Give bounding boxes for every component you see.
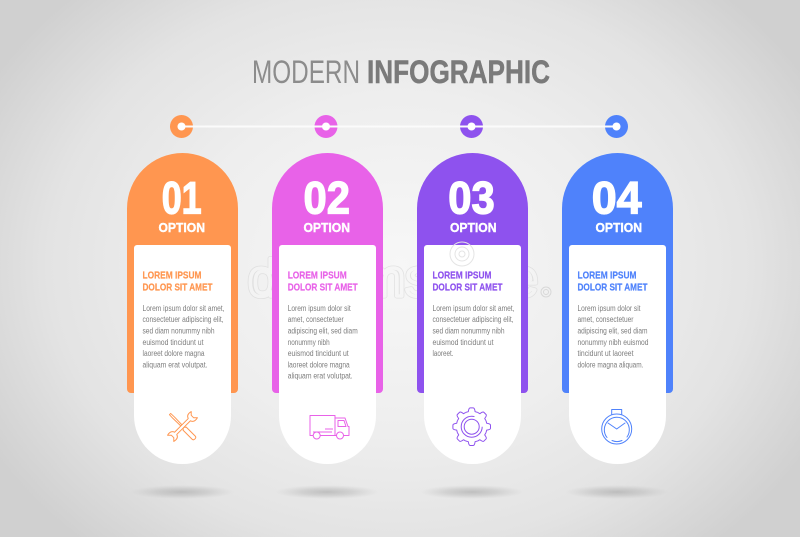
panel: option 01 [127,153,238,499]
number 02: 02 [304,172,350,224]
option label 03: OPTION [450,220,496,235]
heading 03 [432,270,502,293]
body text 01: Lorem ipsum dolor sit amet, [142,304,224,313]
body text 02: adipiscing elit, sed diam [288,326,358,336]
body text 03: sed diam nonummy nibh [432,326,504,336]
number 01: 01 [162,172,202,224]
title: INFOGRAPHIC [367,54,550,90]
body text 01: laoreet dolore magna [142,349,205,358]
icon: stopwatch [602,410,632,444]
ground shadow 03 [420,485,524,499]
icon: delivery truck [310,416,349,439]
colored card 01 [127,153,238,393]
number 03: 03 [448,172,495,224]
heading 02: DOLOR SIT AMET [288,282,358,293]
body text 03: euismod tincidunt ut [432,338,494,347]
colored card 03 [417,153,528,393]
body text 02: aliquam erat volutpat. [288,372,353,381]
body text 01: sed diam nonummy nibh [142,326,214,336]
heading 01: LOREM IPSUM [142,270,202,281]
ground shadow 01 [130,485,234,499]
white card 03 [424,245,521,464]
panel: option 02 [272,153,383,499]
title [252,54,550,90]
body text 02: Lorem ipsum dolor sit [288,304,351,313]
option label 01: OPTION [158,220,205,235]
body text 04 [578,304,648,369]
heading 04: DOLOR SIT AMET [578,282,648,293]
body text 02: euismod tincidunt ut [288,349,349,358]
heading 03: DOLOR SIT AMET [432,282,502,293]
watermark swirl [450,242,474,266]
timeline connector with markers [170,115,628,138]
body text 04: nonummy nibh euismod [578,338,648,347]
title: MODERN [252,54,360,90]
panel: option 04 [562,153,673,499]
white card 01 [134,245,231,464]
body text 03 [432,304,514,358]
body text 01: euismod tincidunt ut [142,338,204,347]
white card 02 [279,245,376,464]
watermark: dreamstime [248,250,538,308]
number 04: 04 [592,172,642,224]
heading 01: DOLOR SIT AMET [142,282,212,293]
body text 02: nonummy nibh [288,338,330,347]
body text 01: consectetuer adipiscing elit, [142,315,224,324]
ground shadow 04 [565,485,669,499]
heading 04: LOREM IPSUM [578,270,636,281]
option label 04: OPTION [596,220,642,235]
heading 04 [578,270,648,293]
option label 02: OPTION [304,220,350,235]
body text 03: consectetuer adipiscing elit, [432,315,514,324]
ground shadow 02 [275,485,379,499]
white card 04 [569,245,666,464]
body text 04: dolore magna aliquam. [578,360,644,369]
body text 04: adipiscing elit, sed diam [578,326,648,336]
heading 03: LOREM IPSUM [432,270,492,281]
panel: option 03 [417,153,528,499]
heading 01 [142,270,212,293]
body text 04: tincidunt ut laoreet [578,349,634,358]
icon: tools [167,411,198,442]
colored card 04 [562,153,673,393]
heading 02: LOREM IPSUM [288,270,347,281]
heading 02 [288,270,358,293]
colored card 02 [272,153,383,393]
body text 03: Lorem ipsum dolor sit amet, [432,304,514,313]
body text 01 [142,304,224,369]
watermark: dreamstime [248,250,538,308]
body text 03: laoreet. [432,349,454,358]
body text 04: amet, consectetuer [578,315,634,324]
body text 02: amet, consectetuer [288,315,344,324]
body text 01: aliquam erat volutpat. [142,360,208,369]
body text 04: Lorem ipsum dolor sit [578,304,641,313]
icon: gear [453,408,491,446]
body text 02 [288,304,358,381]
body text 02: laoreet dolore magna [288,360,350,369]
